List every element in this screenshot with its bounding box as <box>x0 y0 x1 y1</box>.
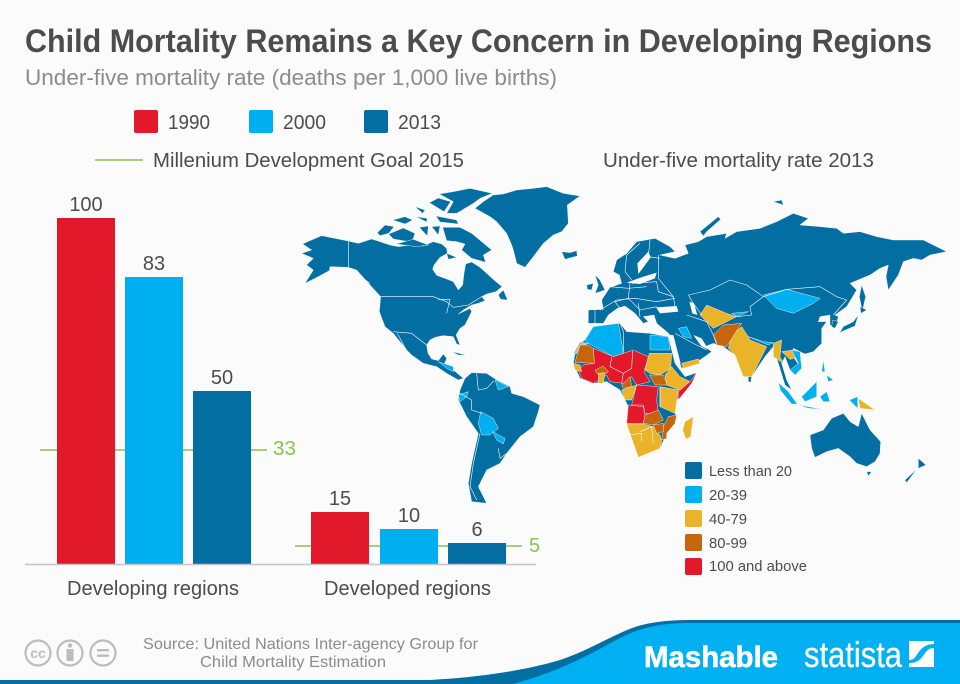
bars: developing regions <box>57 218 251 564</box>
source text: Source: United Nations Inter-agency Group for <box>143 636 479 653</box>
source text <box>143 636 479 671</box>
icons: creative commons <box>26 640 116 666</box>
map: Americas <box>302 187 580 503</box>
map: Europe, Asia, Africa, Oceania <box>573 200 947 483</box>
logo: statista: statista <box>804 634 903 675</box>
legend item: 40-79: 40-79 <box>709 511 747 528</box>
category label: developed: Developed regions <box>324 578 491 600</box>
bar chart <box>25 194 540 600</box>
goal line: developed: 5 <box>529 535 540 557</box>
goal line: developing: 33 <box>273 438 296 460</box>
footer wave <box>0 620 960 684</box>
borders <box>688 280 847 315</box>
map heading: Under-five mortality rate 2013 <box>603 150 874 172</box>
bar values: 6 <box>471 519 483 541</box>
bar values <box>69 194 483 541</box>
icons: creative commons: cc <box>30 645 46 661</box>
bars: developed regions <box>311 512 506 564</box>
logo: Mashable: Mashable <box>644 641 778 674</box>
legend item: less than 20: Less than 20 <box>709 463 792 480</box>
bar values: 100 <box>69 194 103 216</box>
legend item: 100 and above: 100 and above <box>709 558 807 575</box>
world map <box>302 187 947 503</box>
category label: developing: Developing regions <box>67 578 239 600</box>
legend: years: 2000 <box>283 112 326 134</box>
legend item: 80-99: 80-99 <box>709 535 747 552</box>
bar values: 50 <box>211 367 233 389</box>
source text: Child Mortality Estimation <box>200 654 386 671</box>
countries by rate <box>585 323 623 357</box>
bar values: 15 <box>329 488 351 510</box>
sea cut-outs <box>637 252 651 274</box>
map legend <box>685 462 807 575</box>
legend: development goal line: Millenium Development Goal 2015 <box>153 150 464 172</box>
legend: years: 1990 <box>168 112 210 134</box>
bar values: 83 <box>143 253 165 275</box>
bar values: 10 <box>398 505 420 527</box>
legend: years <box>134 110 441 134</box>
legend item: 20-39: 20-39 <box>709 487 747 504</box>
legend: years: 2013 <box>398 112 441 134</box>
title: Child Mortality Remains a Key Concern in Developing Regions <box>25 23 932 59</box>
subtitle: Under-five mortality rate (deaths per 1,000 live births) <box>25 65 557 90</box>
